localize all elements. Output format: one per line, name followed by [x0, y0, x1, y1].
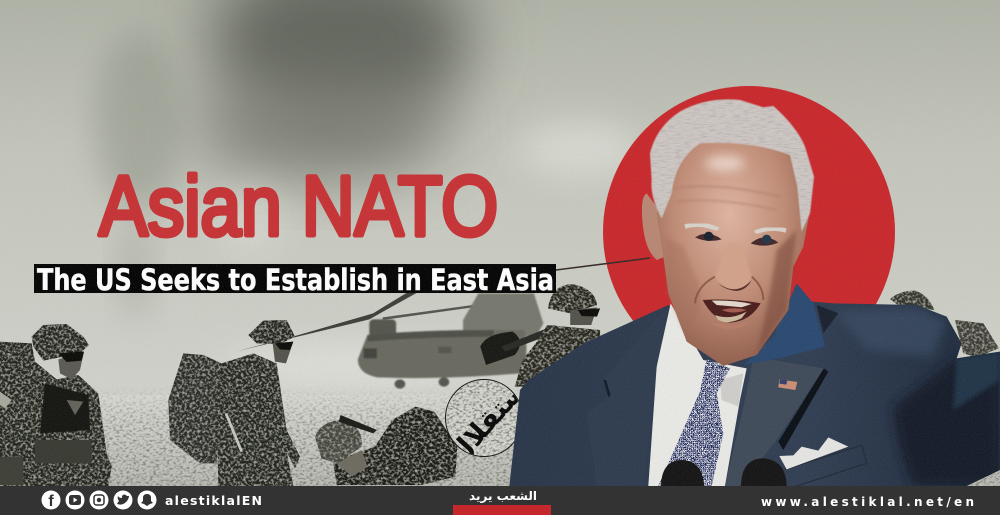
- shirt: [648, 303, 747, 486]
- left lapel: [587, 305, 668, 486]
- logo seal: استقلال: [442, 367, 539, 470]
- hair: [650, 99, 814, 232]
- red sun circle: [603, 86, 895, 378]
- soldier: right of helicopter: [480, 284, 600, 387]
- title: Asian NATO: [99, 159, 498, 253]
- red tab: [453, 505, 551, 515]
- microphones: [661, 458, 787, 486]
- face: [642, 130, 809, 366]
- handle: alestiklalEN: [165, 493, 262, 508]
- subtitle bar: The US Seeks to Establish in East Asia: [37, 263, 554, 297]
- soldier: crouching with pack: [315, 407, 457, 485]
- soldier: centre with backpack: [168, 320, 300, 486]
- right lapel: [725, 357, 828, 486]
- pocket with pocket square: [779, 437, 867, 487]
- helicopter: [235, 290, 543, 389]
- suit jacket: [509, 300, 1000, 486]
- logo seal: [445, 379, 519, 457]
- social icons: [42, 490, 156, 510]
- pin: US flag: [778, 379, 797, 390]
- helicopter rotor wire across circle: [556, 258, 650, 270]
- social icons: f: [48, 493, 54, 510]
- upper collar: [743, 283, 838, 365]
- field of grass: [98, 390, 1000, 486]
- footer bar: [0, 486, 1000, 515]
- soldier: behind right shoulder: [890, 291, 999, 357]
- soldier: left: [0, 324, 112, 486]
- website: www.alestiklal.net/en: [761, 495, 974, 509]
- background: smoky sky: [0, 0, 1000, 395]
- slogan: الشعب يريد: [469, 489, 537, 503]
- tie: [658, 359, 730, 486]
